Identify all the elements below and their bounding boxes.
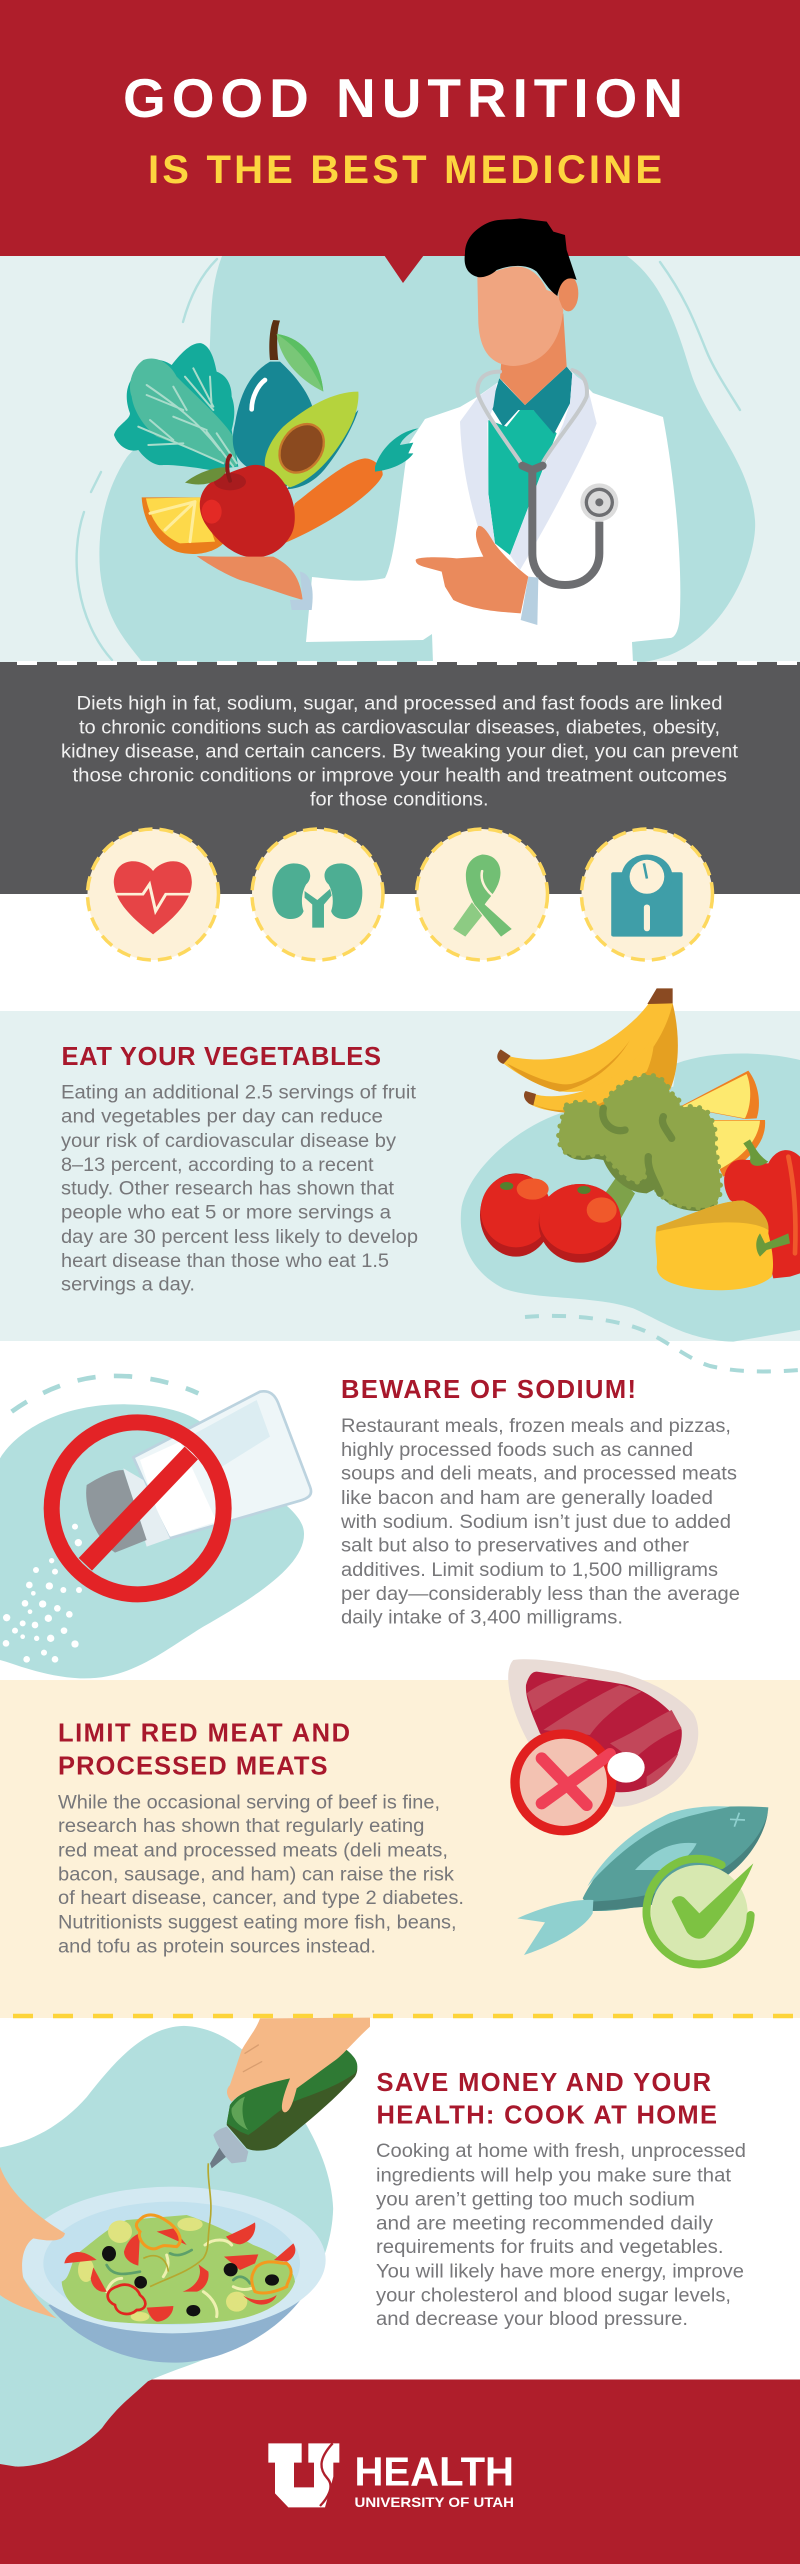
text: cook at home body: and decrease your blood pressure.	[376, 2309, 688, 2330]
text: cook at home body: you aren’t getting too much sodium	[376, 2189, 695, 2210]
text: red meat body: red meat and processed meats (deli meats,	[58, 1840, 448, 1862]
illustration: hero blob	[77, 256, 755, 663]
text: sodium body: per day—considerably less than the average	[341, 1584, 740, 1605]
intro text: for those conditions.	[310, 790, 488, 810]
text: red meat body: and tofu as protein sources instead.	[58, 1936, 376, 1957]
panel: eat your vegetables	[0, 1011, 800, 1341]
text: sodium body: Restaurant meals, frozen meals and pizzas,	[341, 1416, 731, 1437]
divider: yellow dashes	[13, 2014, 800, 2018]
intro text: kidney disease, and certain cancers. By tweaking your diet, you can prevent	[61, 742, 739, 762]
text: vegetables body: study. Other research has shown that	[61, 1179, 395, 1200]
illustration: doctor	[416, 218, 618, 625]
illustration: salt shaker with prohibition sign	[0, 1376, 311, 1678]
heading: save money: SAVE MONEY AND YOUR	[376, 2069, 711, 2097]
text: cook at home body: You will likely have more energy, improve	[376, 2261, 744, 2282]
heading: limit red meat	[58, 1720, 350, 1780]
logo: University of Utah Health	[268, 2443, 514, 2510]
title: GOOD NUTRITION	[123, 67, 683, 129]
text: red meat body: bacon, sausage, and ham) can raise the risk	[58, 1864, 455, 1885]
text: red meat body: While the occasional serving of beef is fine,	[58, 1792, 440, 1813]
text: vegetables body: Eating an additional 2.5 servings of fruit	[61, 1082, 417, 1104]
panel: hero background	[0, 255, 800, 663]
text: vegetables body: heart disease than those who eat 1.5	[61, 1251, 389, 1272]
text: cook at home body: requirements for fruits and vegetables.	[376, 2237, 724, 2258]
illustration: steak with cross mark	[508, 1659, 698, 1831]
illustration: doctor coat	[306, 367, 680, 663]
text: sodium body: soups and deli meats, and processed meats	[341, 1464, 737, 1485]
text: cook at home body: your cholesterol and blood sugar levels,	[376, 2285, 731, 2306]
text: sodium body	[340, 1416, 740, 1629]
icon: ribbon	[416, 829, 548, 960]
wordmark: HEALTH: HEALTH	[354, 2448, 514, 2494]
wordmark: University of Utah: UNIVERSITY OF UTAH	[354, 2494, 514, 2510]
panel: footer band	[0, 2380, 800, 2564]
text: vegetables body: and vegetables per day can reduce	[61, 1107, 383, 1128]
icon: weight scale	[582, 829, 712, 960]
heading: beware of sodium: BEWARE OF SODIUM!	[341, 1376, 636, 1404]
illustration: fruit and vegetables held by doctor	[114, 320, 418, 610]
decorative dashed path	[525, 1316, 800, 1371]
text: vegetables body: servings a day.	[61, 1275, 195, 1296]
subtitle: IS THE BEST MEDICINE	[148, 148, 662, 192]
illustration: fruit and vegetable pile	[461, 988, 800, 1342]
text: red meat body: of heart disease, cancer, and type 2 diabetes.	[58, 1888, 464, 1909]
text: sodium body: additives. Limit sodium to 1,500 milligrams	[341, 1560, 718, 1581]
illustration: blob behind salad	[0, 2026, 333, 2467]
text: vegetables body: day are 30 percent less likely to develop	[61, 1227, 418, 1248]
text: sodium body: salt but also to preservatives and other	[341, 1536, 690, 1557]
text: sodium body: highly processed foods such as canned	[341, 1440, 693, 1461]
panel: limit red meat	[0, 1680, 800, 2018]
intro text: to chronic conditions such as cardiovascular diseases, diabetes, obesity,	[79, 718, 720, 738]
icon: kidneys	[252, 829, 383, 960]
intro text: those chronic conditions or improve your health and treatment outcomes	[72, 766, 727, 786]
icon: U with DNA strand	[268, 2443, 339, 2507]
text: cook at home body: and are meeting recommended daily	[376, 2214, 714, 2234]
intro text: Diets high in fat, sodium, sugar, and processed and fast foods are linked	[76, 694, 722, 714]
text: cook at home body: ingredients will help you make sure that	[376, 2165, 732, 2186]
heading: eat your vegetables: EAT YOUR VEGETABLES	[62, 1043, 381, 1071]
illustration: fish with check mark	[517, 1806, 768, 1964]
text: vegetables body: people who eat 5 or more servings a	[61, 1203, 391, 1224]
heading: save money: HEALTH: COOK AT HOME	[376, 2102, 717, 2130]
text: sodium body: with sodium. Sodium isn’t just due to added	[340, 1512, 731, 1533]
intro text	[61, 694, 739, 810]
text: sodium body: daily intake of 3,400 milligrams.	[341, 1608, 623, 1629]
text: vegetables body: your risk of cardiovascular disease by	[61, 1131, 397, 1152]
icon: heart	[88, 829, 218, 960]
text: sodium body: like bacon and ham are generally loaded	[341, 1488, 713, 1509]
text: red meat body	[58, 1792, 464, 1957]
heading: limit red meat: LIMIT RED MEAT AND	[58, 1720, 350, 1748]
text: cook at home body: Cooking at home with fresh, unprocessed	[376, 2141, 746, 2162]
heading: limit red meat: PROCESSED MEATS	[58, 1752, 328, 1780]
text: vegetables body: 8–13 percent, according to a recent	[61, 1155, 374, 1176]
illustration: salad bowl, hands and oil bottle	[0, 2018, 370, 2363]
text: red meat body: research has shown that regularly eating	[58, 1816, 424, 1837]
panel: intro gray band	[0, 662, 800, 894]
text: vegetables body	[61, 1082, 418, 1296]
header band	[0, 0, 800, 283]
text: red meat body: Nutritionists suggest eating more fish, beans,	[58, 1912, 457, 1934]
text: cook at home body	[376, 2141, 746, 2330]
heading: save money	[376, 2069, 717, 2130]
